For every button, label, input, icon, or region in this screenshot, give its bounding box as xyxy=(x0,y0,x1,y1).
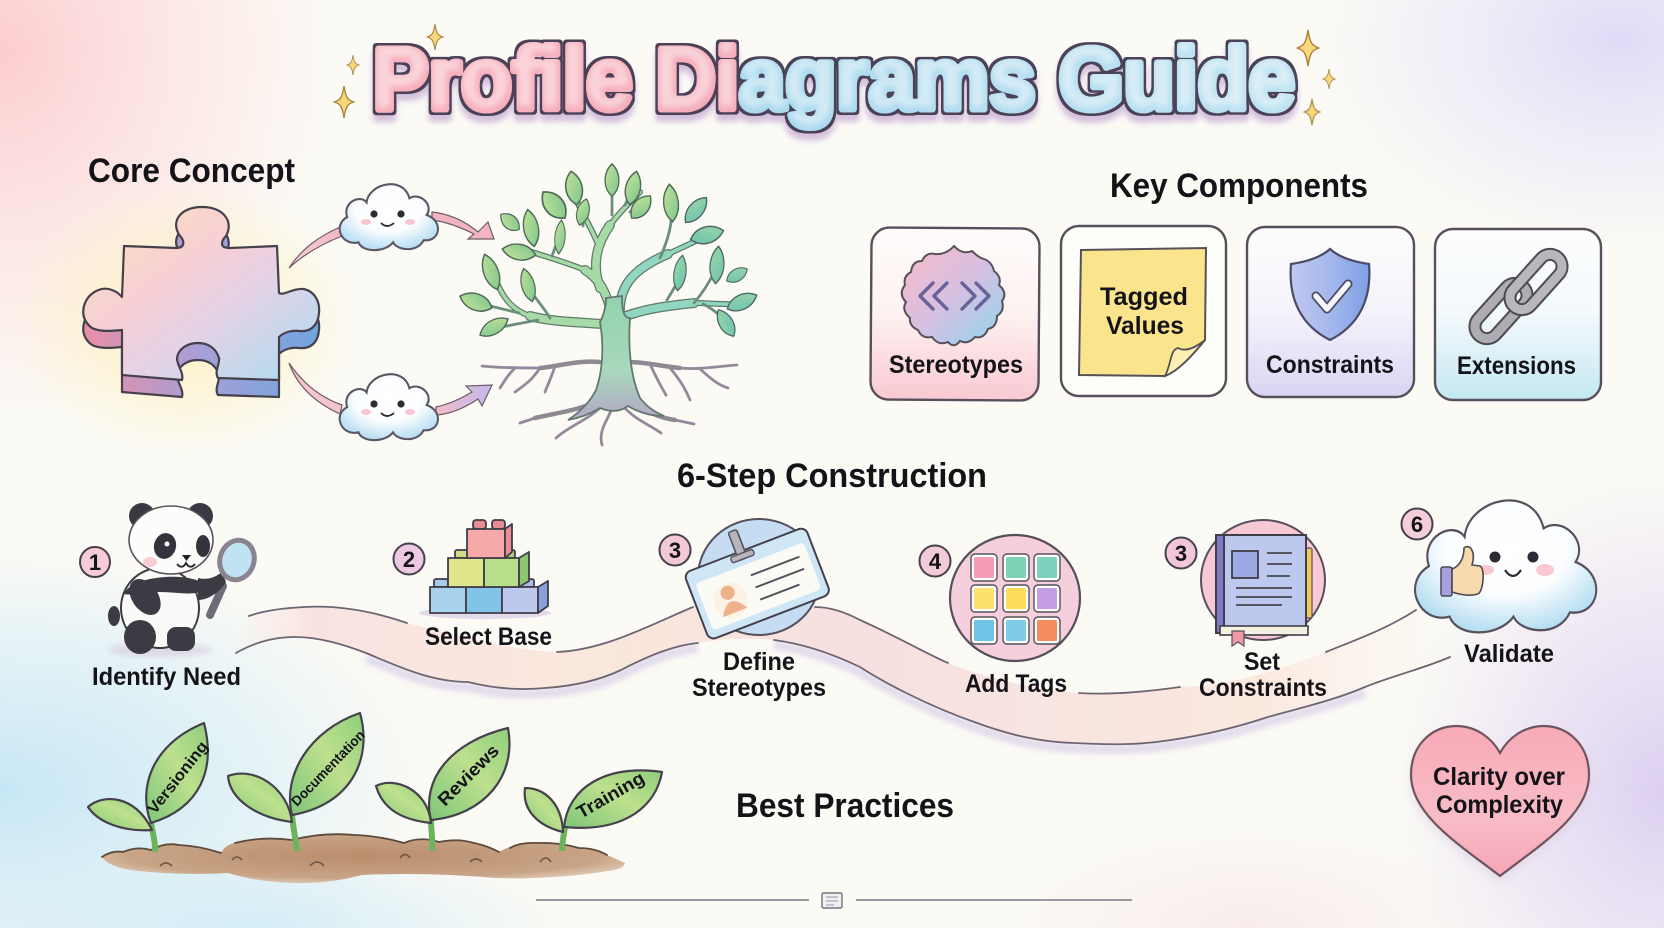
arrow: puzzle to tree, top xyxy=(289,212,494,268)
heading: 6-step construction: 6-Step Construction xyxy=(677,457,987,495)
icon: sticky note xyxy=(1079,248,1206,376)
icon: cloud top xyxy=(340,184,438,250)
number badge 6 xyxy=(1402,508,1432,540)
soil mound xyxy=(102,834,625,883)
icon: tree with roots xyxy=(457,164,760,445)
number badge 3 repeat: 3 xyxy=(1175,541,1187,566)
step 2: select base xyxy=(394,520,552,651)
label: define: Define xyxy=(723,648,795,676)
number badge 3: 3 xyxy=(669,538,681,563)
icon: cloud bottom xyxy=(340,374,438,440)
step 5: set constraints xyxy=(1166,520,1327,702)
callout: heart xyxy=(1411,726,1589,882)
footer rule with icon xyxy=(536,893,1132,908)
number badge 3 xyxy=(660,534,690,566)
label: identify need: Identify Need xyxy=(92,663,241,691)
label: add tags: Add Tags xyxy=(965,670,1067,698)
label: values: Values xyxy=(1106,312,1184,340)
step 3: define stereotypes xyxy=(660,506,831,702)
icon: stacked blocks xyxy=(419,520,551,619)
label: extensions: Extensions xyxy=(1457,352,1576,380)
number badge 4 xyxy=(920,546,950,576)
number badge 4: 4 xyxy=(929,549,942,574)
number badge 6: 6 xyxy=(1411,512,1423,537)
icon: panda with magnifier xyxy=(108,503,259,657)
heading: best practices: Best Practices xyxy=(736,787,954,825)
label: stereotypes: Stereotypes xyxy=(889,351,1023,379)
icon: shield with check xyxy=(1291,249,1369,340)
icon: id badge xyxy=(676,506,831,640)
icon: note curl xyxy=(1165,340,1205,376)
icon: chain link xyxy=(1470,249,1567,344)
title: Profile Diagrams Guide xyxy=(373,31,1295,128)
panel: core concept xyxy=(83,152,760,445)
heading: key components: Key Components xyxy=(1110,167,1368,205)
icon: puzzle piece xyxy=(83,207,319,397)
step 6: validate xyxy=(1402,500,1596,668)
number badge 2 xyxy=(394,544,424,574)
label: reviews: Reviews xyxy=(434,741,503,810)
label: clarity over: Clarity over xyxy=(1433,763,1565,791)
label: constraints: Constraints xyxy=(1266,351,1394,379)
icon: scalloped badge xyxy=(902,246,1004,345)
label: set: Set xyxy=(1244,648,1281,676)
number badge 2: 2 xyxy=(403,547,415,572)
label: tagged: Tagged xyxy=(1100,283,1188,311)
sparkles around title xyxy=(334,24,1335,125)
panel: best practices xyxy=(88,713,954,883)
card: stereotypes xyxy=(870,227,1040,401)
step 4: add tags xyxy=(920,535,1080,698)
number badge 1 xyxy=(80,547,110,577)
plant: versioning xyxy=(88,723,212,852)
label: stereotypes: Stereotypes xyxy=(692,674,826,702)
label: constraints: Constraints xyxy=(1199,674,1327,702)
number badge 1: 1 xyxy=(89,550,101,575)
path: winding road xyxy=(226,603,1450,749)
icon: cloud with thumbs up xyxy=(1415,500,1596,632)
number badge 3 repeat xyxy=(1166,538,1196,568)
step 1: identify need xyxy=(80,503,259,691)
icon: rule book xyxy=(1201,520,1325,646)
label: complexity: Complexity xyxy=(1436,791,1563,819)
plant: documentation xyxy=(228,713,368,851)
plant: training xyxy=(525,768,662,851)
panel: key components xyxy=(870,167,1601,401)
label: select base: Select Base xyxy=(425,623,552,651)
label: validate: Validate xyxy=(1464,640,1554,668)
label: documentation: Documentation xyxy=(288,727,368,809)
card: tagged values xyxy=(1061,226,1226,396)
icon: sticker grid xyxy=(950,535,1080,661)
card: extensions xyxy=(1435,229,1601,400)
card: constraints xyxy=(1247,227,1414,397)
label: versioning: Versioning xyxy=(145,738,212,817)
heading: core concept: Core Concept xyxy=(88,152,295,190)
label: training: Training xyxy=(573,768,648,822)
arrow: puzzle to tree, bottom xyxy=(289,363,492,415)
plant: reviews xyxy=(376,728,510,851)
